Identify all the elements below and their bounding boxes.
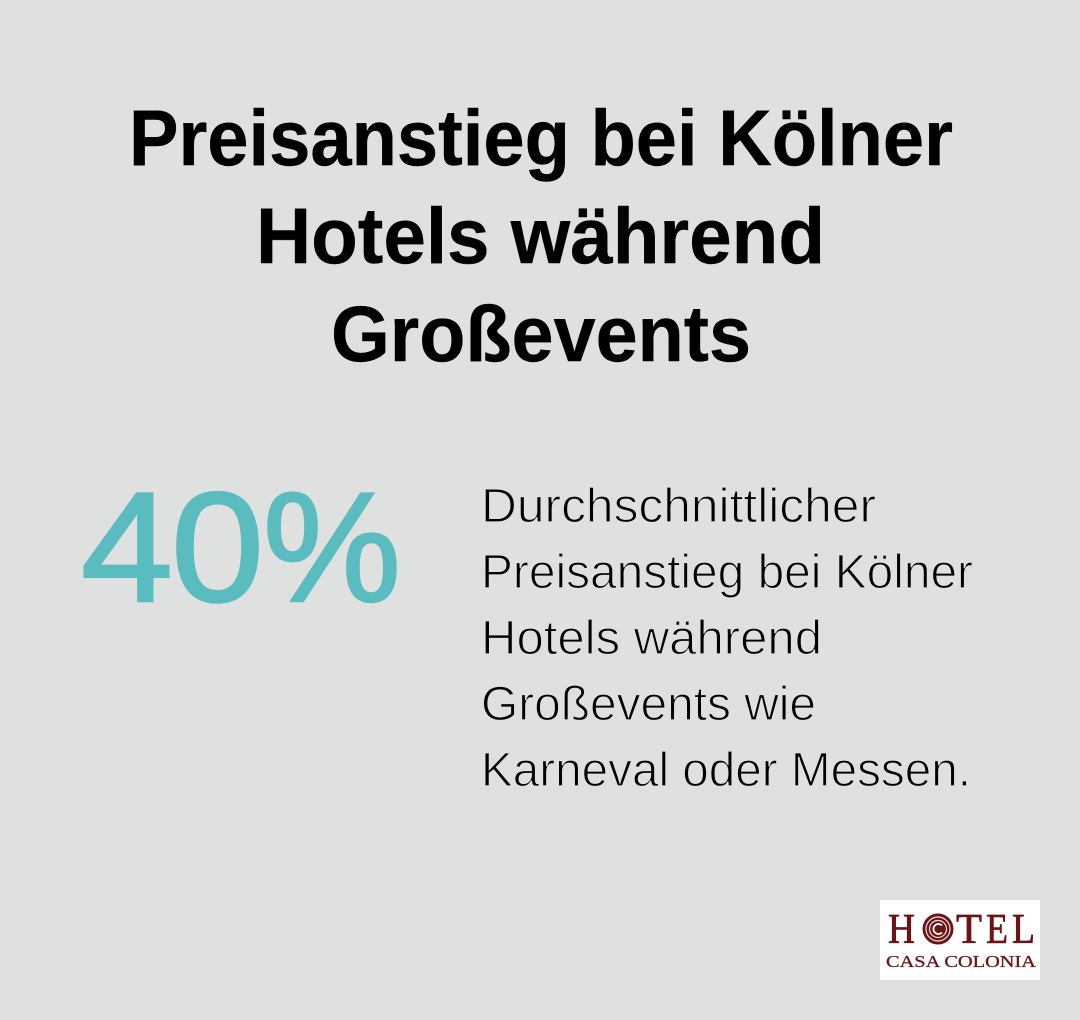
description text: Großevents wie [481,677,816,731]
title: Preisanstieg bei Kölner [129,93,953,182]
description text: Preisanstieg bei Kölner [481,545,973,599]
description text: Hotels während [481,611,822,665]
logo: Hotel Casa Colonia: E [986,907,1008,953]
icon: logo spiral O [922,914,954,944]
big statistic: 40%: 4 [81,461,173,635]
description text: Durchschnittlicher [481,479,876,533]
logo: Hotel Casa Colonia: CASA COLONIA [886,952,1037,971]
logo: Hotel Casa Colonia: T [956,907,982,953]
logo: Hotel Casa Colonia [880,900,1040,980]
logo: Hotel Casa Colonia: H [888,907,915,953]
description text: Karneval oder Messen. [481,743,971,797]
logo: Hotel Casa Colonia: L [1012,907,1035,953]
title: Hotels während [256,191,825,280]
title: Großevents [331,289,751,378]
description text [481,479,973,797]
title [129,93,953,378]
big statistic: 40%: 0 [171,461,264,635]
big statistic: 40% [81,461,401,635]
big statistic: 40%: % [263,461,401,635]
